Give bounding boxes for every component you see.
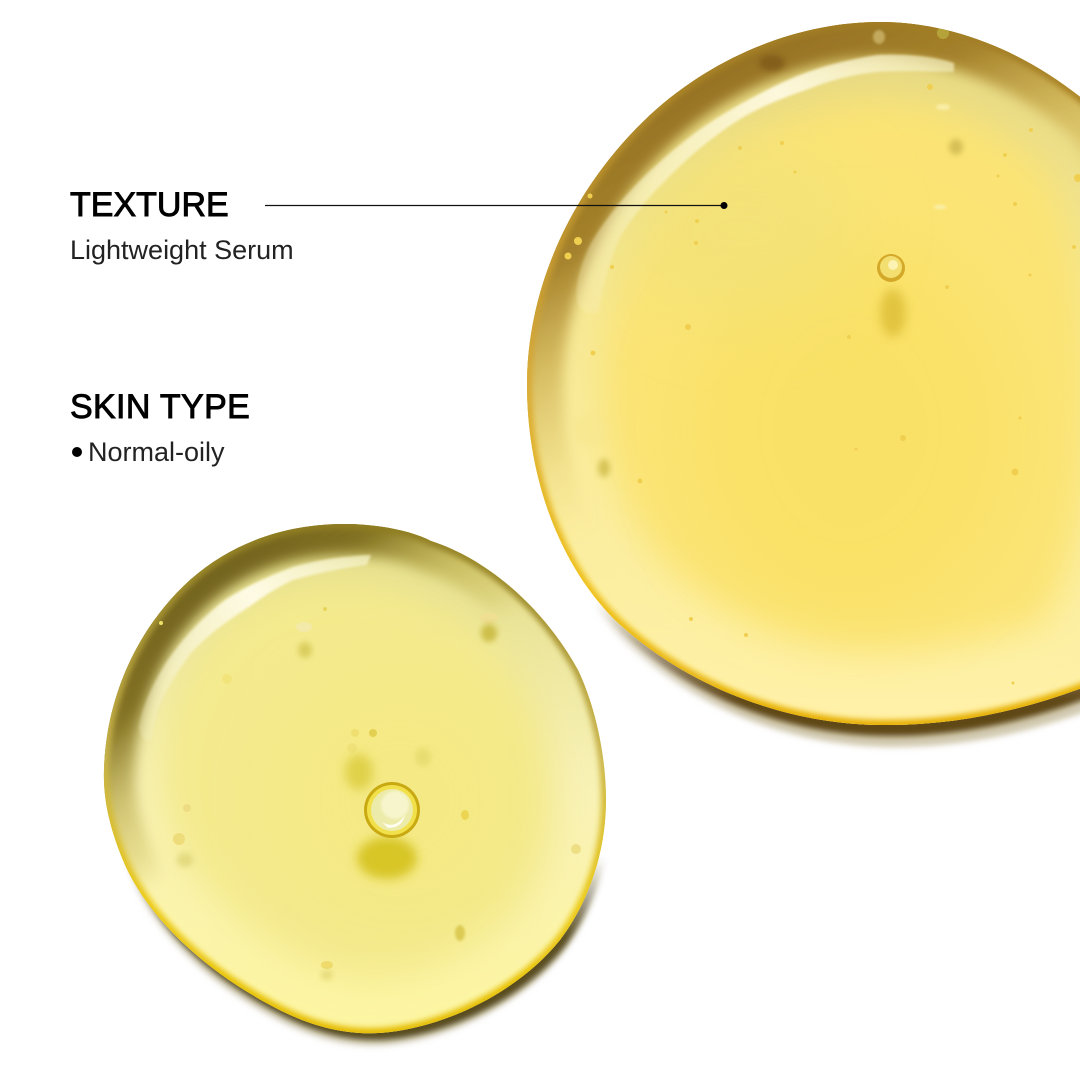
centre bubble — [364, 782, 420, 838]
small serum droplet — [95, 515, 615, 1046]
tiny air bubbles — [564, 84, 1080, 684]
leader line from TEXTURE to droplet — [265, 202, 728, 209]
large serum droplet — [520, 10, 1080, 747]
centre bubble shadow — [357, 837, 417, 879]
pale specks and soft spots — [159, 607, 581, 980]
heading: texture: TEXTURE — [70, 186, 229, 224]
text: lightweight serum: Lightweight Serum — [70, 235, 294, 265]
rim specks and soft spots — [574, 27, 963, 477]
text: normal-oily with bullet: Normal-oily — [88, 437, 225, 467]
gloss highlight — [577, 55, 954, 314]
small bubble with shadow — [877, 254, 906, 337]
gloss highlight — [139, 555, 371, 741]
heading: skin type: SKIN TYPE — [70, 388, 250, 426]
